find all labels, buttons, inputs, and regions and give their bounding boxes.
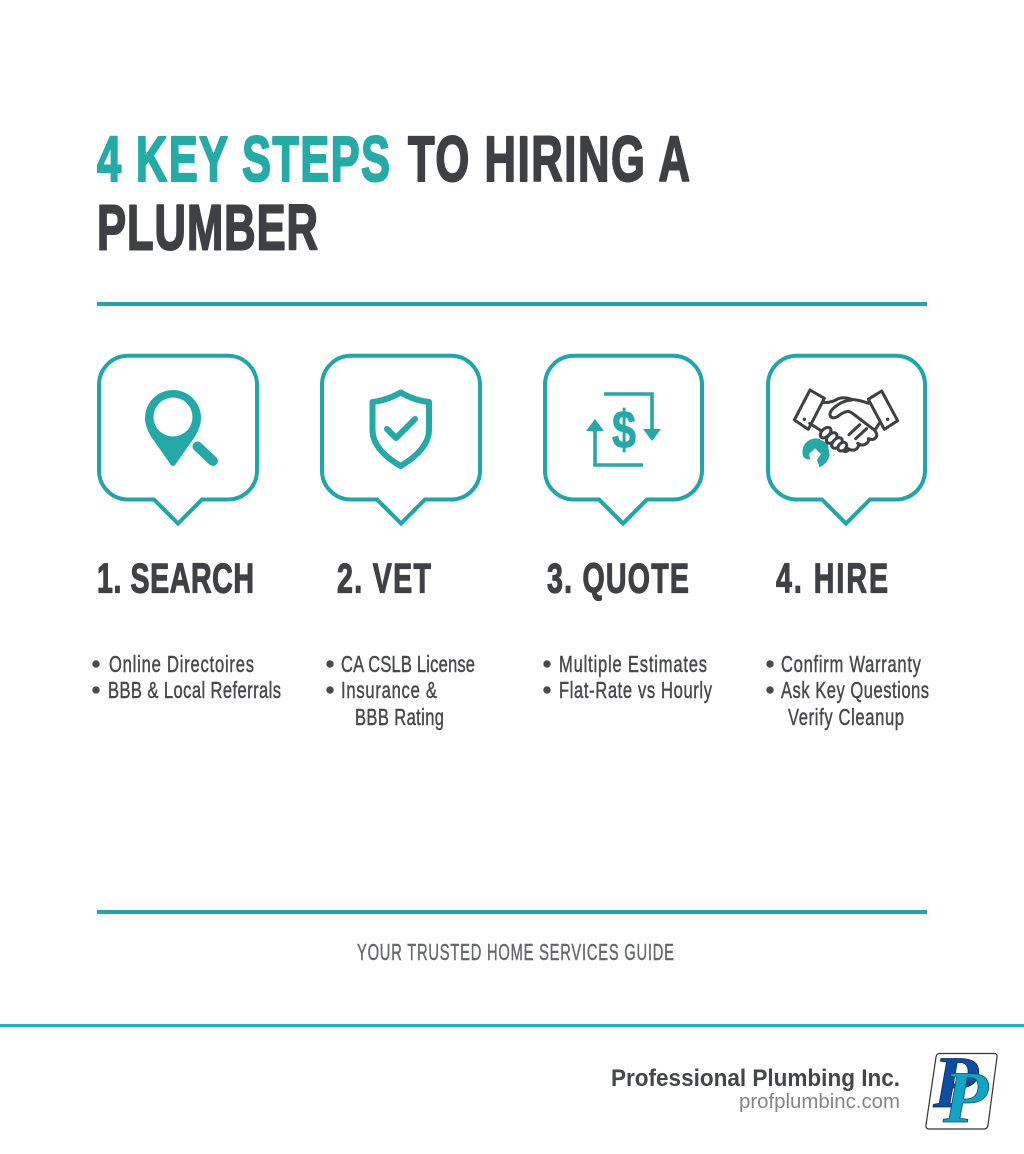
title: TO HIRING A: [408, 123, 690, 195]
icon: dollar exchange arrows: $: [612, 400, 636, 460]
list: vet bullets: [326, 652, 475, 731]
list: search bullets: Online Directoires: [109, 652, 254, 678]
title: [97, 123, 690, 264]
title: PLUMBER: [97, 191, 318, 264]
heading: 3. quote: 3. QUOTE: [547, 554, 689, 602]
list: search bullets: BBB & Local Referrals: [108, 678, 281, 704]
list: hire bullets: [766, 652, 929, 731]
title: 4 KEY STEPS: [97, 123, 390, 195]
speech bubble 4: [768, 356, 925, 524]
footer brand: [611, 1042, 997, 1139]
heading: 2. vet: 2. VET: [337, 554, 431, 602]
icon: location pin magnifier: [145, 390, 213, 466]
heading: 4. hire: 4. HIRE: [776, 554, 888, 602]
icon: dollar exchange arrows: [586, 394, 661, 465]
logo: P: [932, 1042, 979, 1124]
panel: step 4 hire: [766, 356, 929, 731]
company url: profplumbinc.com: [739, 1091, 900, 1113]
panel: step 2 vet: [322, 356, 480, 731]
speech bubble 1: [99, 356, 257, 524]
panel: step 1 search: [92, 356, 281, 704]
list: search bullets: [92, 652, 281, 704]
logo: [926, 1042, 997, 1139]
heading: 1. search: 1. SEARCH: [97, 554, 254, 602]
list: hire bullets: Ask Key Questions: [781, 678, 929, 704]
list: vet bullets: BBB Rating: [355, 705, 444, 731]
icon: shield check: [372, 392, 429, 466]
list: vet bullets: CA CSLB License: [341, 652, 475, 678]
company name: Professional Plumbing Inc.: [611, 1065, 900, 1092]
list: hire bullets: Confirm Warranty: [781, 652, 921, 678]
logo: P: [942, 1057, 989, 1139]
list: quote bullets: Flat-Rate vs Hourly: [559, 678, 712, 704]
panel: step 3 quote: [544, 356, 712, 704]
speech bubble 2: [322, 356, 480, 524]
list: quote bullets: [544, 652, 712, 704]
speech bubble 3: [545, 356, 702, 524]
tagline: YOUR TRUSTED HOME SERVICES GUIDE: [357, 941, 674, 966]
list: hire bullets: Verify Cleanup: [788, 705, 904, 731]
icon: handshake with wrench: [794, 390, 898, 467]
list: quote bullets: Multiple Estimates: [559, 652, 707, 678]
list: vet bullets: Insurance &: [341, 678, 437, 704]
